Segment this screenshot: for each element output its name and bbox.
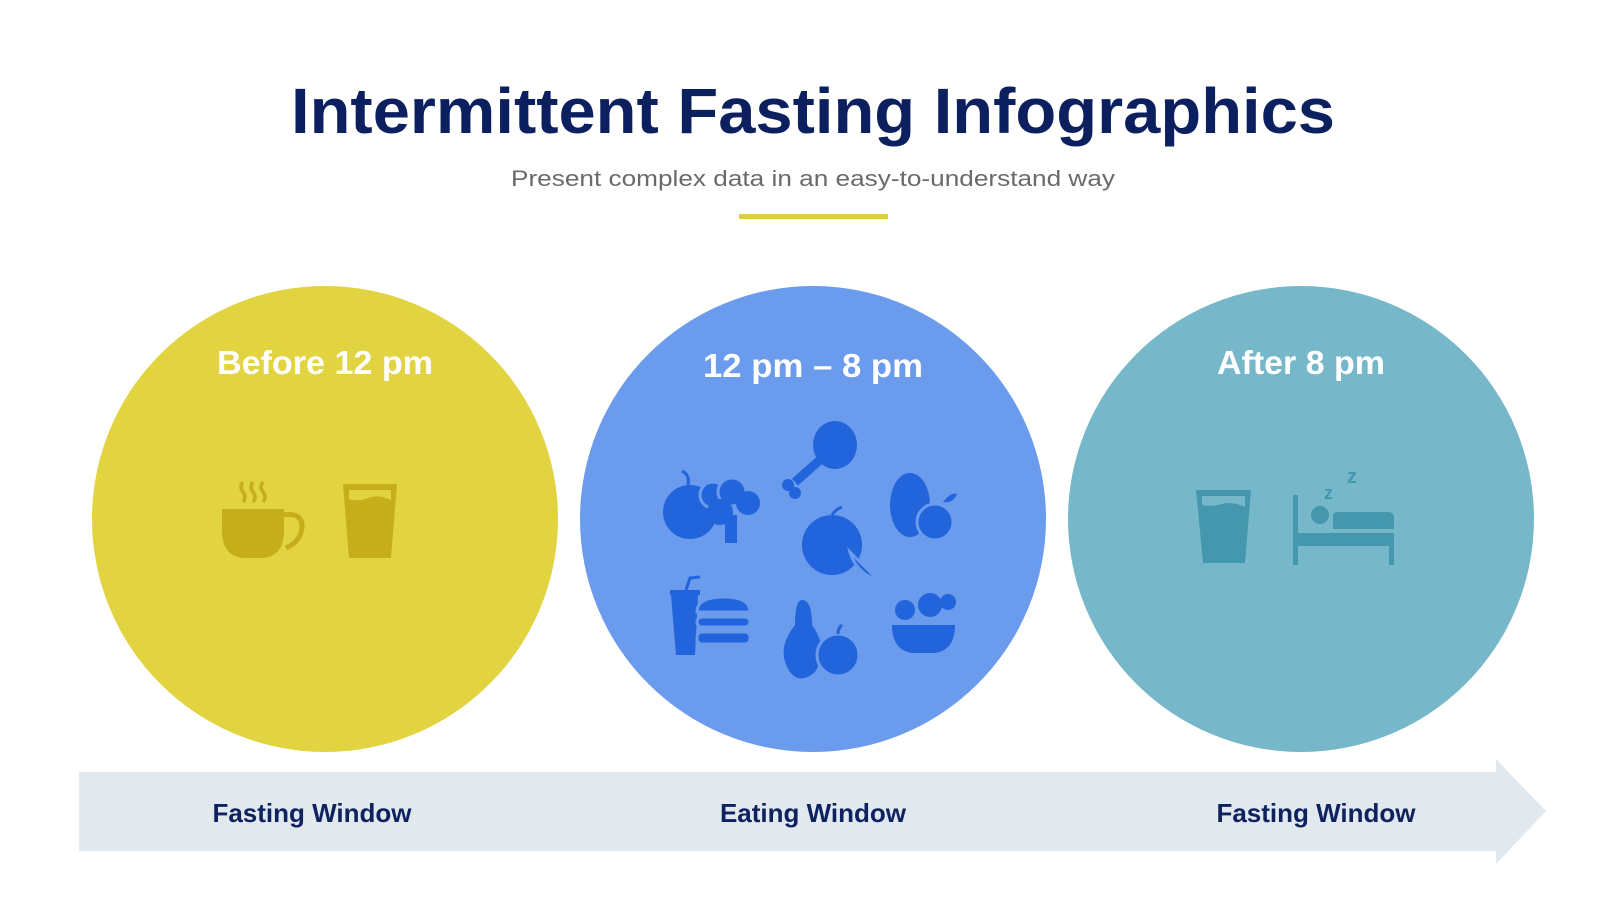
heading: 12 pm - 8 pm: 12 pm – 8 pm <box>703 347 923 384</box>
icon: pear and apple <box>784 600 859 678</box>
subtitle: Present complex data in an easy-to-understand way <box>511 166 1115 191</box>
heading: after 8 pm: After 8 pm <box>1217 344 1385 381</box>
panel: before 12 pm <box>92 286 558 752</box>
accent line <box>739 214 888 219</box>
icon: salad bowl <box>892 593 956 653</box>
panel: 12 pm - 8 pm <box>580 286 1046 752</box>
icon: bed with sleeper: z <box>1347 466 1357 488</box>
icon: chicken leg <box>782 421 857 499</box>
title: Intermittent Fasting Infographics <box>291 75 1335 147</box>
icon: drink and burger <box>670 577 750 655</box>
icon: glass of water <box>343 484 397 558</box>
icon: bed with sleeper <box>1293 466 1394 565</box>
icon: apple and broccoli <box>663 471 760 543</box>
icon: glass of water <box>1196 490 1251 563</box>
icon: orange <box>802 507 878 580</box>
label: fasting window 2: Fasting Window <box>1216 798 1416 828</box>
icon: leafy greens and apple <box>890 473 957 540</box>
heading: before 12 pm: Before 12 pm <box>217 344 433 381</box>
panel: after 8 pm <box>1068 286 1534 752</box>
arrow: timeline <box>79 759 1546 864</box>
label: fasting window 1: Fasting Window <box>212 798 412 828</box>
icon: coffee cup <box>222 482 302 558</box>
icon: bed with sleeper: z <box>1324 483 1333 503</box>
label: eating window: Eating Window <box>720 798 907 828</box>
